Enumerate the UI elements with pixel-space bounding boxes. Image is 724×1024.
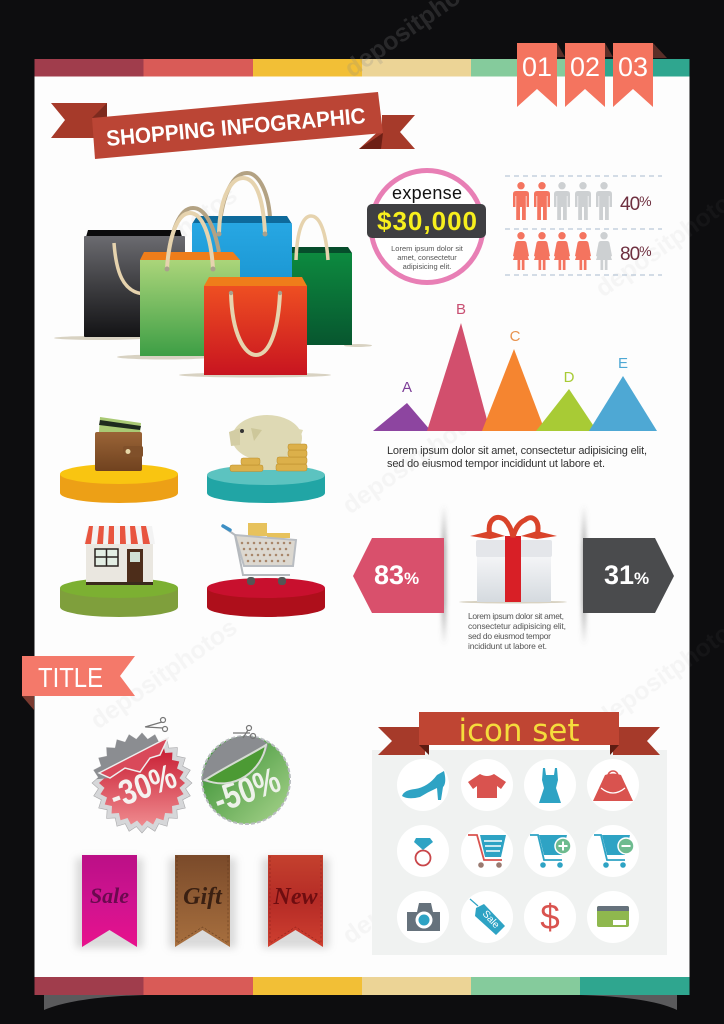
text: depositphotos [337, 398, 495, 520]
icon: sale tag [470, 899, 505, 935]
expense badge [367, 170, 486, 282]
red bag [204, 277, 307, 375]
icon: t-shirt [468, 774, 506, 798]
chart caption: sed do eiusmod tempor incididunt ut labore et. [387, 458, 605, 470]
expense caption: amet, consectetur [397, 253, 457, 262]
left arrow 83% [353, 538, 444, 613]
ribbon: Sale [76, 855, 143, 948]
text: depositphotos [85, 613, 243, 735]
tab 03: 03 [618, 52, 648, 82]
-50% text: -50% [208, 759, 286, 821]
icon: cart list [468, 835, 506, 868]
chart caption: Lorem ipsum dolor sit amet, consectetur adipisicing elit, [387, 445, 647, 457]
icon: camera [407, 903, 440, 931]
chart letters: C [510, 328, 521, 345]
men row 40%: % [639, 193, 651, 209]
expense label: expense [392, 183, 462, 203]
triangle chart [373, 301, 657, 431]
amount bar: $30,000 [377, 206, 477, 236]
top colour bar [34, 59, 690, 76]
panel: icon set [372, 712, 667, 955]
gift caption: incididunt ut labore et. [468, 641, 547, 651]
platform: wallet [60, 417, 178, 503]
ribbon: Gift: Gift [183, 884, 223, 910]
icon: handbag [593, 771, 633, 801]
women row 80% [513, 232, 651, 270]
tab 01: 01 [522, 52, 552, 82]
icon: credit card [597, 906, 629, 927]
icon: gift box [459, 517, 567, 604]
icon: piggy bank [229, 415, 307, 472]
chart letters [402, 301, 628, 396]
icon: high heel [402, 771, 445, 800]
blue bag [192, 173, 292, 285]
light green bag [140, 208, 240, 356]
chart letters: D [564, 369, 575, 386]
icon: cart add [530, 835, 571, 868]
icon: shopping cart [223, 523, 296, 585]
ribbon: New [262, 855, 329, 948]
icon: ring [414, 838, 433, 866]
ribbon: Gift [169, 855, 236, 948]
dark green bag [292, 216, 352, 345]
expense caption [391, 244, 464, 271]
title ribbon [51, 92, 415, 159]
icon: dress [539, 768, 561, 803]
shopping bags illustration [54, 173, 372, 378]
women row 80%: 80 [620, 244, 639, 265]
title text: SHOPPING INFOGRAPHIC [105, 103, 367, 151]
text: depositphotos [337, 828, 495, 950]
expense caption: Lorem ipsum dolor sit [391, 244, 464, 253]
chart letters: A [402, 379, 412, 396]
page number tabs [517, 43, 667, 107]
platform: shop [60, 526, 178, 617]
men row 40% [513, 182, 651, 220]
tab 02 [565, 43, 605, 107]
sticker: -30% [92, 733, 192, 833]
gift caption: sed do eiusmod tempor [468, 631, 551, 641]
gift caption: consectetur adipisicing elit, [468, 621, 566, 631]
tab 01 [517, 43, 557, 107]
icon: scissors [145, 718, 256, 738]
platform: piggy bank [207, 415, 325, 503]
expense caption: adipisicing elit. [403, 262, 451, 271]
gift caption: Lorem ipsum dolor sit amet, [468, 611, 564, 621]
icon set banner [378, 712, 660, 755]
women row 80%: % [639, 243, 651, 259]
icon: dollar sign: $ [540, 898, 560, 937]
right arrow 31% [583, 538, 674, 613]
bottom page curl shadow [44, 995, 677, 1010]
tab 03 [613, 43, 653, 107]
black bag [84, 230, 185, 337]
tab 02: 02 [570, 52, 600, 82]
section title ribbon: TITLE [38, 662, 103, 693]
section title ribbon [22, 656, 135, 710]
gift panel [353, 505, 674, 651]
platform: cart [207, 523, 325, 617]
men row 40%: 40 [620, 194, 639, 215]
right arrow 31%: 31% [604, 560, 649, 590]
text: depositphotos [85, 181, 243, 303]
chart letters: B [456, 301, 466, 318]
sticker: -50% [202, 736, 290, 824]
gift caption [468, 611, 566, 651]
chart caption [387, 445, 647, 470]
icon set banner: icon set [458, 713, 580, 749]
chart letters: E [618, 355, 628, 372]
icon: wallet [95, 417, 143, 471]
ribbon: New: New [272, 884, 318, 910]
bottom colour bar [34, 977, 690, 995]
icon: shop [84, 526, 155, 585]
left arrow 83%: 83% [374, 560, 419, 590]
people statistics [505, 176, 662, 275]
icon: cart remove [594, 835, 634, 868]
ribbon: Sale: Sale [90, 883, 129, 908]
-30% text: -30% [104, 757, 182, 817]
icon: sale tag: Sale [480, 909, 502, 931]
